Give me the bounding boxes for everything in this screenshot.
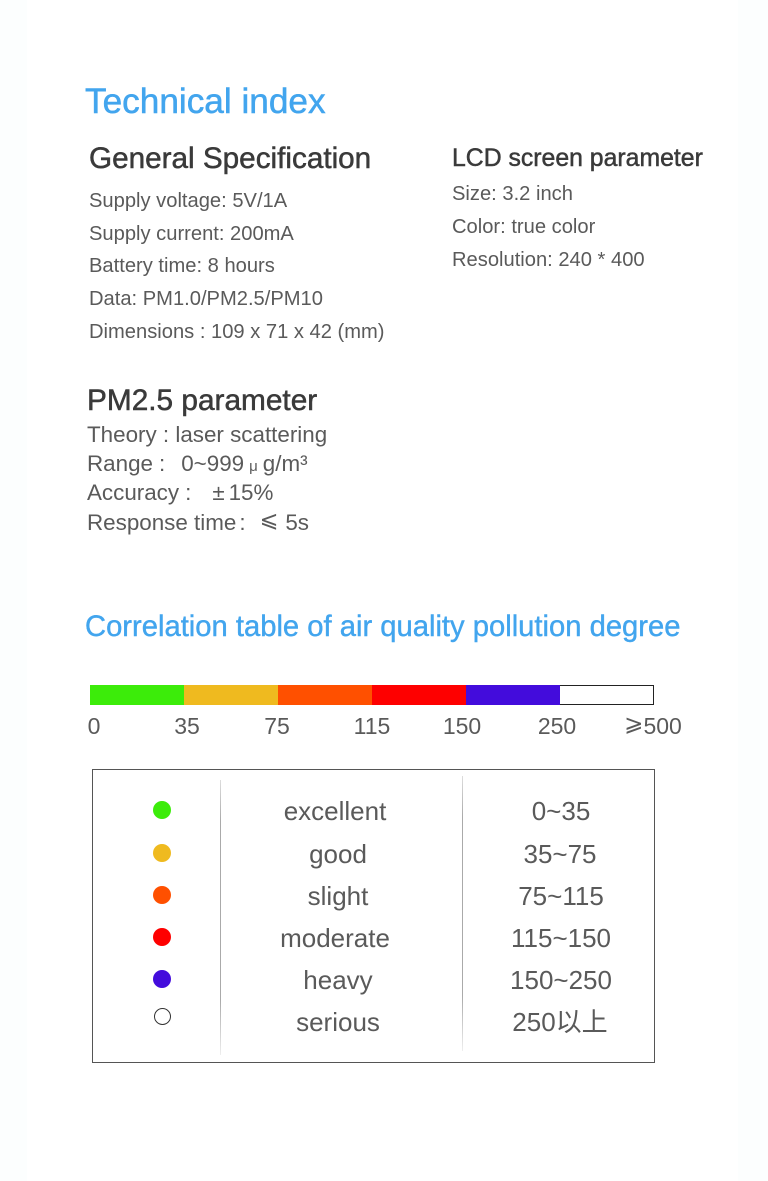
row: good (153, 839, 597, 869)
panel: LCD screen parameter (452, 145, 703, 271)
row: moderate (153, 923, 611, 953)
text: range: Range : 0~999 μg/m³ (87, 451, 308, 476)
heading: General Specification: General Specification (89, 142, 371, 175)
dot (153, 928, 171, 946)
scale labels (88, 710, 682, 739)
label: 150: 150 (443, 713, 481, 739)
label: 250: 250 (538, 713, 576, 739)
text: accuracy: Accuracy : ±15% (87, 480, 273, 505)
title: Technical index: Technical index (85, 82, 326, 121)
dot (154, 1008, 171, 1025)
level: serious (296, 1007, 380, 1037)
heading: LCD screen parameter: LCD screen parameter (452, 145, 703, 172)
text: resolution: Resolution: 240 * 400 (452, 249, 645, 271)
text: response time: Response time: ⩽ 5s (87, 507, 309, 535)
text: size: Size: 3.2 inch (452, 183, 573, 205)
level: heavy (303, 965, 373, 995)
segment: slight (278, 685, 372, 705)
dot (153, 801, 171, 819)
level: moderate (280, 923, 390, 953)
dot (153, 886, 171, 904)
segment: good (184, 685, 278, 705)
dot (153, 970, 171, 988)
row: serious (154, 1007, 608, 1037)
heading: PM2.5 parameter: PM2.5 parameter (87, 384, 317, 417)
text: color: Color: true color (452, 216, 595, 238)
text: battery time: Battery time: 8 hours (89, 255, 275, 277)
heading: correlation table: Correlation table of air quality pollution degree (85, 611, 680, 643)
range: 250以上 (512, 1007, 608, 1037)
text: theory: Theory : laser scattering (87, 422, 327, 447)
text: data: Data: PM1.0/PM2.5/PM10 (89, 288, 323, 310)
row: heavy (153, 965, 612, 995)
text: dimensions: Dimensions : 109 x 71 x 42 (mm) (89, 321, 385, 343)
label: 115: 115 (354, 713, 390, 739)
segment: serious (560, 685, 654, 705)
text: supply voltage: Supply voltage: 5V/1A (89, 190, 287, 212)
segment: heavy (466, 685, 560, 705)
text: supply current: Supply current: 200mA (89, 223, 294, 245)
color scale bar (90, 685, 654, 705)
label: 35: 35 (174, 713, 200, 739)
level: good (309, 839, 367, 869)
label: 0: 0 (88, 713, 100, 739)
segment: excellent (90, 685, 184, 705)
range: 75~115 (518, 881, 604, 911)
range: 0~35 (532, 796, 590, 826)
row: slight (153, 881, 604, 911)
range: 150~250 (510, 965, 612, 995)
level: slight (308, 881, 368, 911)
label: 500 or more: ⩾500 (624, 710, 682, 739)
panel: PM2.5 parameter (87, 384, 327, 535)
dot (153, 844, 171, 862)
range: 115~150 (511, 923, 611, 953)
level: excellent (284, 796, 386, 826)
range: 35~75 (523, 839, 597, 869)
panel: pollution degree table (92, 769, 655, 1063)
segment: moderate (372, 685, 466, 705)
label: 75: 75 (264, 713, 290, 739)
row: excellent (153, 796, 590, 826)
panel: general specification (89, 142, 385, 343)
